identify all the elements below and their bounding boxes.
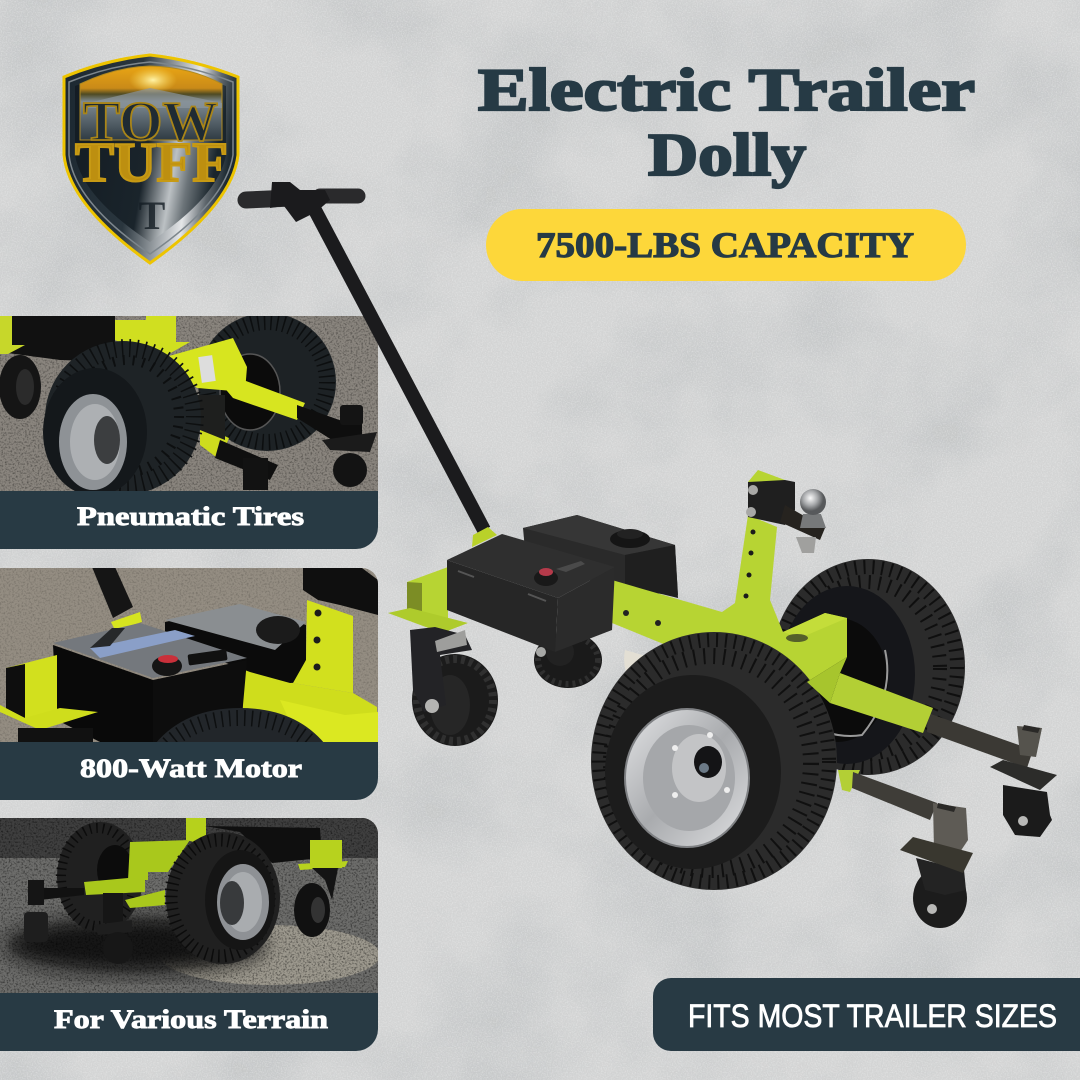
panel: various terrain	[0, 818, 380, 1051]
front battery box	[388, 534, 615, 652]
front caster	[410, 627, 498, 746]
panel: pneumatic tires	[0, 313, 378, 549]
logo wordmark TUFF: TUFF	[75, 132, 228, 194]
front arm	[830, 673, 1057, 837]
title: Dolly	[648, 122, 806, 188]
hitch ball mount	[746, 470, 826, 553]
product: electric trailer dolly	[246, 182, 1057, 928]
handle	[246, 182, 497, 547]
front wheel rim	[625, 709, 749, 847]
logo: Tow Tuff shield	[64, 55, 238, 263]
photo: tires close-up	[0, 313, 378, 496]
label text: 800-Watt Motor	[80, 754, 302, 783]
rear wheel	[771, 559, 965, 775]
capacity badge	[486, 209, 966, 281]
panel: 800-watt motor	[0, 567, 378, 800]
label bar	[0, 993, 378, 1051]
title: Electric Trailer	[478, 57, 975, 123]
label text: Pneumatic Tires	[77, 502, 304, 531]
photo: battery boxes	[0, 567, 378, 744]
logo wordmark TOW: TOW	[83, 91, 218, 153]
label text: For Various Terrain	[54, 1005, 329, 1034]
second arm and caster	[838, 770, 973, 928]
green frame and hitch post	[612, 515, 847, 683]
back caster	[534, 632, 602, 688]
frame knuckle	[807, 657, 847, 703]
photo: dolly on gravel	[0, 818, 380, 995]
title	[478, 57, 975, 188]
front tire	[591, 632, 837, 890]
logo sunset window	[80, 66, 222, 140]
capacity badge: 7500-LBS CAPACITY	[536, 225, 914, 265]
logo monogram: T	[139, 193, 166, 238]
label bar	[0, 742, 378, 800]
back battery box	[523, 515, 678, 598]
callout: fits most trailer sizes	[653, 978, 1080, 1051]
label bar	[0, 491, 378, 549]
